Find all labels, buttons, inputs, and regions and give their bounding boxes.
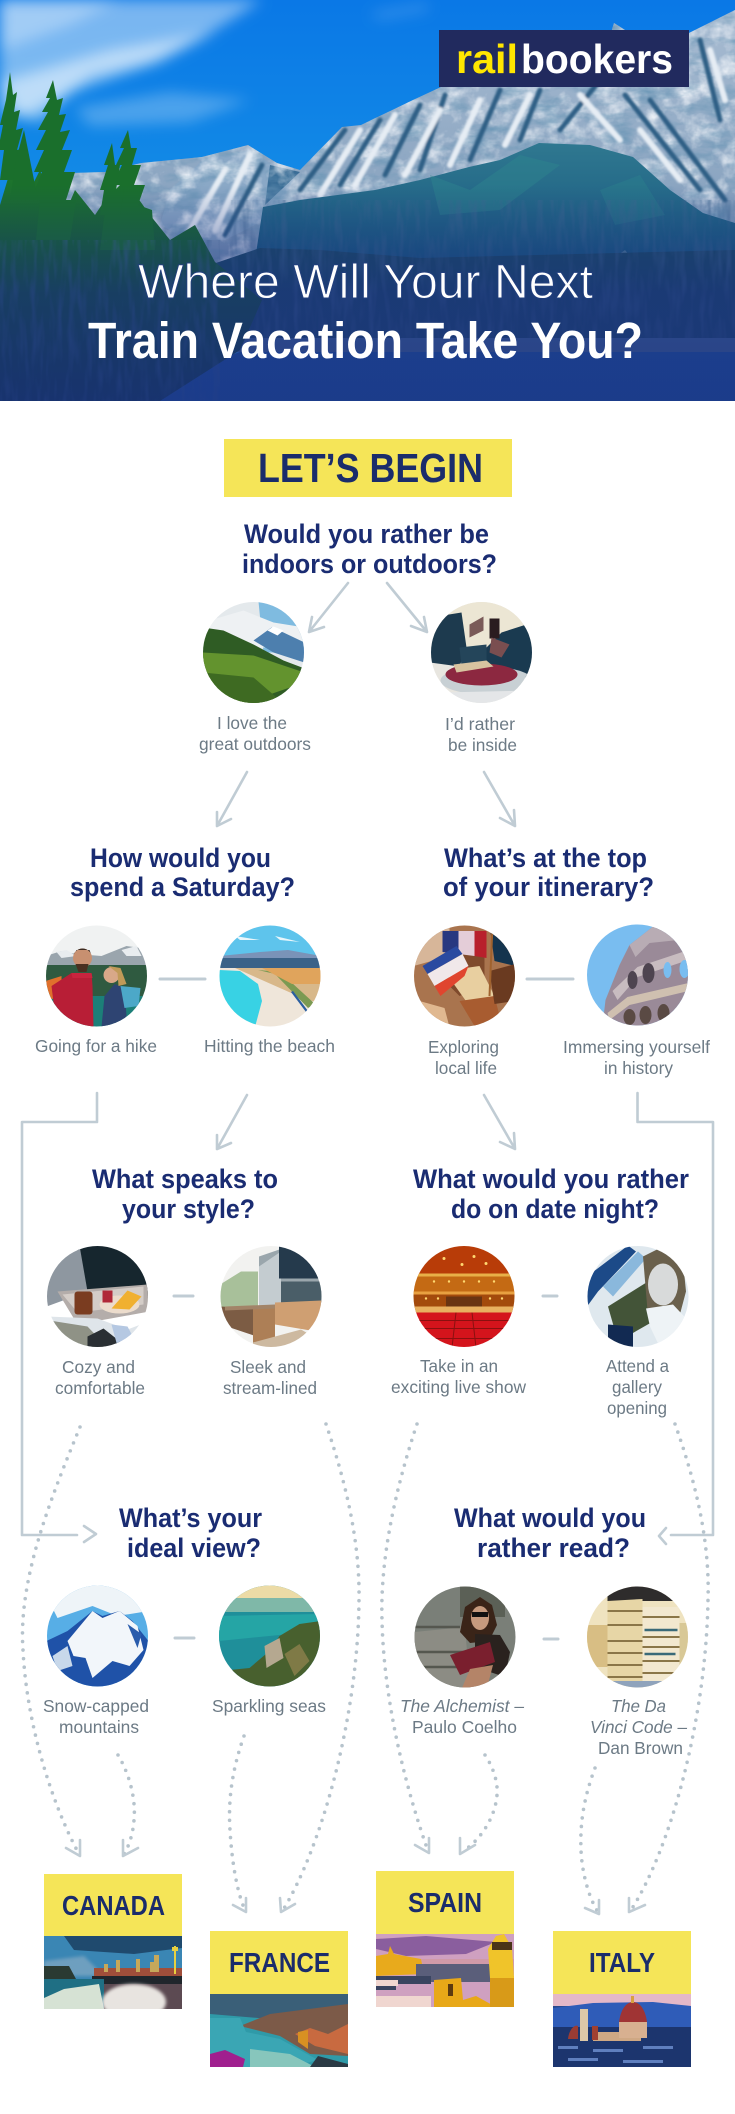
destination: Spain [376, 1871, 514, 2007]
question: style: your style? [122, 1194, 255, 1224]
photo: forest hillside [202, 602, 304, 704]
caption: beach: Hitting the beach [204, 1036, 335, 1056]
question: indoors or outdoors [242, 519, 497, 579]
connector [174, 1294, 193, 1298]
logo: railbookers [439, 30, 689, 87]
connector [527, 978, 573, 980]
question: ideal view [119, 1503, 262, 1563]
photo: Florence Duomo [553, 1994, 691, 2067]
caption: inside: I’d rather [445, 714, 515, 734]
connector: history to read [638, 1093, 713, 1544]
caption: gallery: Attend a [606, 1356, 669, 1376]
arrow: outdoors to Saturday [217, 772, 247, 826]
caption: local life [428, 1037, 499, 1078]
question: Saturday: spend a Saturday? [70, 872, 295, 902]
start banner: let's begin: LET’S BEGIN [258, 445, 483, 491]
caption: sleek [223, 1357, 317, 1398]
caption: Alchemist [400, 1696, 524, 1737]
caption: mountains: mountains [59, 1717, 139, 1737]
connector [544, 1638, 558, 1640]
dotted route: gallery to Italy [629, 1424, 708, 1912]
destination: Canada [44, 1874, 182, 2020]
question: Saturday [70, 843, 295, 902]
photo: Riviera town [210, 1994, 348, 2067]
question: Saturday: How would you [90, 843, 271, 873]
arrow: inside to itinerary [484, 772, 515, 826]
caption: history: Immersing yourself [563, 1037, 710, 1057]
arrow: to outdoors [309, 583, 348, 632]
dotted route: sparkling seas to France [230, 1736, 246, 1912]
question: itinerary: What’s at the top [444, 843, 647, 873]
caption: live show [391, 1356, 526, 1397]
photo: woman reading [414, 1586, 516, 1688]
question: itinerary [443, 843, 654, 902]
connector [175, 1636, 194, 1640]
logo: railbookers: bookers [521, 36, 673, 82]
destination: Canada: CANADA [62, 1890, 165, 1921]
photo: restaurant dinner [430, 602, 532, 704]
photo: Nice beach [219, 925, 321, 1027]
photo: sparkling sea and cliff [218, 1585, 320, 1687]
caption: Alchemist: Paulo Coelho [412, 1717, 517, 1737]
title: Where Will Your Next [138, 256, 593, 309]
caption: live show: exciting live show [391, 1377, 526, 1397]
dotted route: live show to Spain [382, 1424, 429, 1853]
start banner: let's begin [224, 439, 512, 497]
question: rather read: rather read? [477, 1533, 630, 1563]
photo: mountain lake [0, 0, 735, 401]
destination: Italy: ITALY [589, 1947, 655, 1978]
caption: Alchemist: The Alchemist – [400, 1696, 524, 1716]
photo: theatre [413, 1246, 515, 1348]
photo: local food with flags [414, 925, 516, 1027]
caption: gallery: opening [607, 1398, 667, 1418]
caption: outdoors [199, 713, 311, 754]
photo: Colosseum [586, 924, 690, 1026]
caption: sleek: Sleek and [230, 1357, 306, 1377]
title [88, 262, 640, 358]
caption: sleek: stream-lined [223, 1378, 317, 1398]
photo: David statue [587, 1246, 689, 1348]
connector [543, 1294, 557, 1298]
caption: Da Vinci Code: The Da [611, 1696, 666, 1716]
question: ideal view: What’s your [119, 1503, 262, 1533]
logo: railbookers: rail [456, 36, 518, 82]
photo: snow-capped mountain [46, 1585, 148, 1687]
caption: history [563, 1037, 710, 1078]
photo: stacks of books [586, 1586, 688, 1688]
arrow: to indoors [387, 583, 427, 632]
caption: outdoors: I love the [217, 713, 287, 733]
dotted route: cozy to Canada [22, 1427, 80, 1856]
arrow: local life to date night [484, 1095, 515, 1149]
caption: gallery [606, 1356, 669, 1418]
caption: seas: Sparkling seas [212, 1696, 326, 1716]
dotted route: Da Vinci Code to Italy [581, 1768, 599, 1914]
caption: Da Vinci Code [590, 1696, 687, 1758]
title: Train Vacation Take You? [88, 312, 643, 369]
caption: Da Vinci Code: Vinci Code – [590, 1717, 687, 1737]
connector [160, 978, 205, 980]
caption: hike: Going for a hike [35, 1036, 157, 1056]
caption: live show: Take in an [420, 1356, 498, 1376]
photo: Spanish skyline [376, 1934, 514, 2007]
question: date night: What would you rather [413, 1164, 689, 1194]
arrow: beach to style [217, 1095, 247, 1149]
question: ideal view: ideal view? [127, 1533, 261, 1563]
caption: inside [445, 714, 517, 755]
caption: Da Vinci Code: Dan Brown [598, 1738, 683, 1758]
question: itinerary: of your itinerary? [443, 872, 654, 902]
question: indoors or outdoors: indoors or outdoors? [242, 549, 497, 579]
caption: inside: be inside [448, 735, 517, 755]
dotted route: sleek to France [280, 1424, 359, 1912]
destination: Italy [553, 1931, 691, 2067]
caption: cozy: Cozy and [62, 1357, 135, 1377]
question: indoors or outdoors: Would you rather be [244, 519, 489, 549]
connector: hike to ideal view [22, 1093, 97, 1542]
photo: modern kitchen [220, 1246, 322, 1348]
caption: mountains [43, 1696, 149, 1737]
photo: Niagara Falls [44, 1936, 182, 2009]
question: date night: do on date night? [451, 1194, 659, 1224]
caption: cozy: comfortable [55, 1378, 145, 1398]
destination: Spain: SPAIN [408, 1887, 482, 1918]
caption: local life: local life [435, 1058, 497, 1078]
photo: hikers [46, 925, 148, 1027]
question: date night [413, 1164, 689, 1224]
question: rather read: What would you [454, 1503, 646, 1533]
dotted route: snow-capped to Canada [118, 1755, 138, 1856]
caption: mountains: Snow-capped [43, 1696, 149, 1716]
dotted route: Alchemist to Spain [460, 1755, 497, 1854]
caption: local life: Exploring [428, 1037, 499, 1057]
question: style [92, 1164, 278, 1224]
photo: breakfast tray [46, 1246, 150, 1348]
caption: gallery: gallery [612, 1377, 662, 1397]
destination: France [210, 1931, 348, 2067]
question: rather read [454, 1503, 646, 1563]
caption: cozy [55, 1357, 145, 1398]
destination: France: FRANCE [229, 1947, 330, 1978]
caption: outdoors: great outdoors [199, 734, 311, 754]
caption: history: in history [604, 1058, 673, 1078]
question: style: What speaks to [92, 1164, 278, 1194]
header banner [0, 0, 735, 401]
